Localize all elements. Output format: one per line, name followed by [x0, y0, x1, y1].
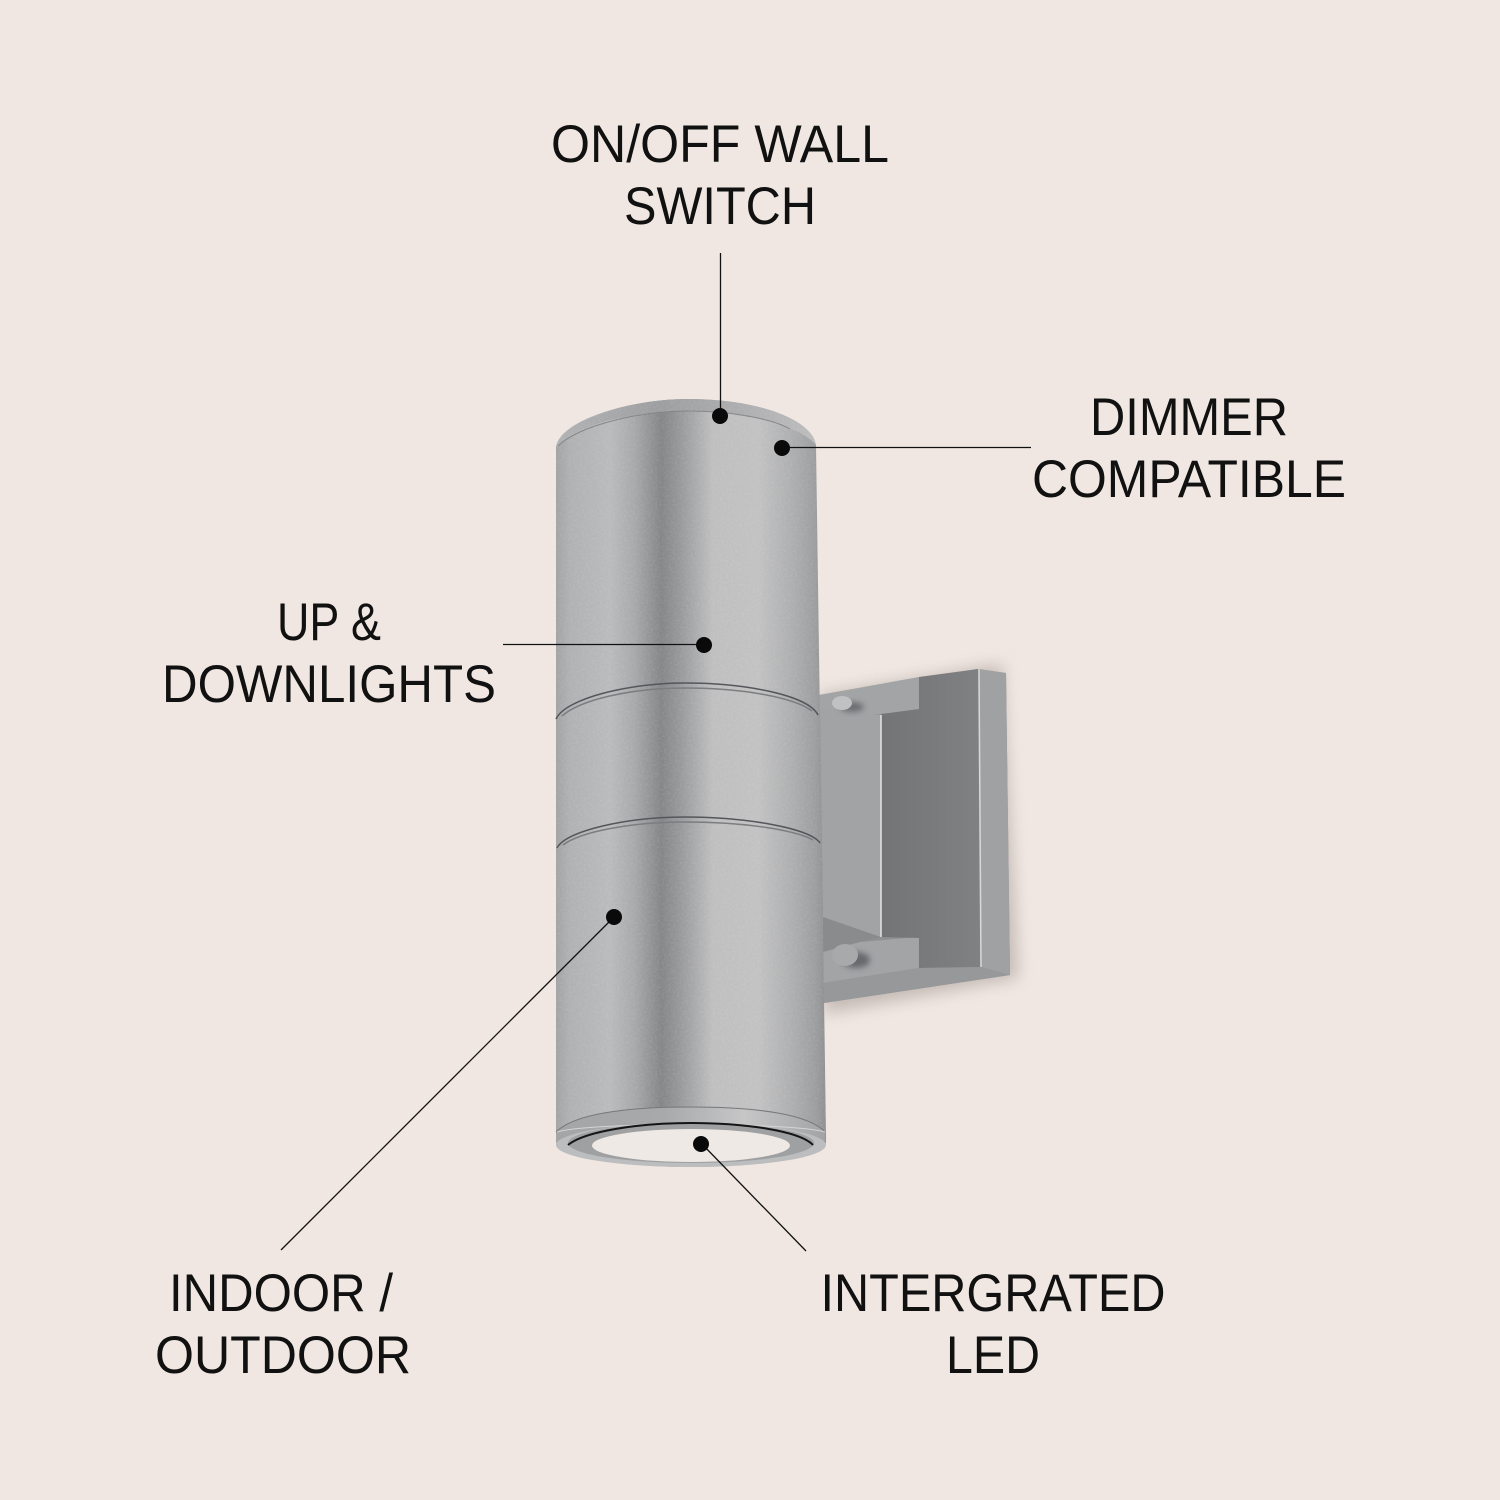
bolts	[832, 696, 870, 968]
callout: on/off wall switch: ON/OFF WALL	[551, 115, 889, 174]
callout: on/off wall switch	[551, 115, 889, 424]
callout: up and downlights	[162, 593, 712, 714]
callout: integrated led: INTERGRATED	[820, 1264, 1166, 1323]
cylinder body	[550, 395, 835, 1175]
callout: integrated led: LED	[946, 1326, 1040, 1385]
mounting bracket	[819, 664, 1018, 1014]
callout: dimmer compatible	[774, 388, 1346, 509]
bottom rim and LED lens	[556, 1107, 826, 1167]
callout: up and downlights: DOWNLIGHTS	[162, 655, 496, 714]
callout: up and downlights: UP &	[277, 593, 381, 652]
wall light product illustration	[550, 395, 1018, 1175]
callout: dimmer compatible: DIMMER	[1090, 388, 1288, 447]
callout: on/off wall switch: SWITCH	[624, 177, 816, 236]
callout: dimmer compatible: COMPATIBLE	[1032, 450, 1346, 509]
callout: indoor / outdoor: OUTDOOR	[155, 1326, 411, 1385]
cylinder ring seams	[556, 683, 820, 848]
callout: indoor / outdoor: INDOOR /	[169, 1264, 393, 1323]
callout: integrated led	[693, 1136, 1166, 1385]
callout: indoor / outdoor	[155, 909, 622, 1385]
